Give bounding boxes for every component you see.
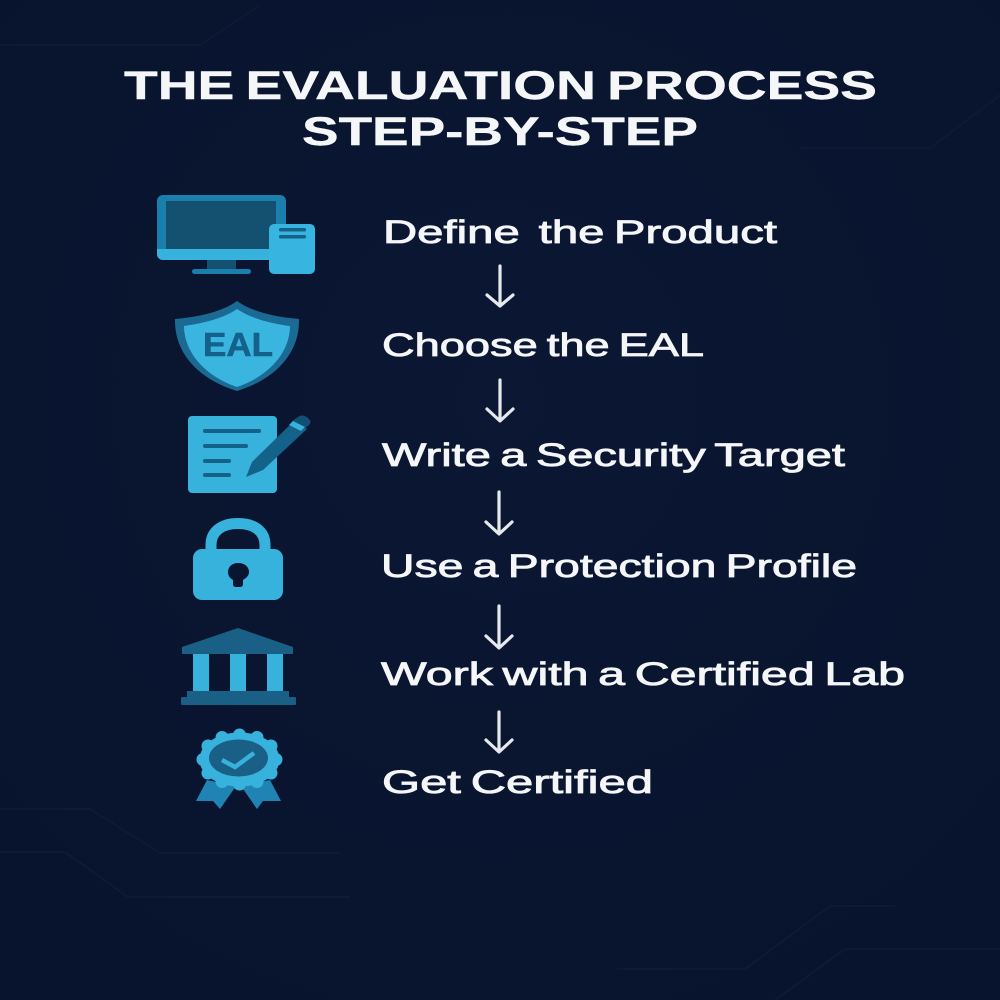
text: step 3: Write a Security Target bbox=[382, 437, 845, 473]
title bbox=[124, 64, 877, 154]
icon: EAL shield: EAL bbox=[203, 326, 273, 363]
arrow 3 bbox=[486, 492, 512, 534]
icon: computer monitor and device bbox=[157, 195, 315, 274]
arrow 1 bbox=[487, 266, 513, 306]
text: step 2: Choose the EAL bbox=[382, 327, 704, 363]
icon: document and pen bbox=[188, 416, 310, 493]
title: THE EVALUATION PROCESS bbox=[124, 64, 877, 108]
arrow 5 bbox=[486, 712, 512, 752]
text: step 4: Use a Protection Profile bbox=[381, 548, 857, 584]
text: step 5: Work with a Certified Lab bbox=[381, 656, 905, 692]
text: step 6: Get Certified bbox=[382, 764, 653, 800]
title: STEP-BY-STEP bbox=[302, 110, 698, 154]
arrow 2 bbox=[487, 380, 513, 421]
arrow 4 bbox=[486, 606, 512, 648]
icon: certified badge bbox=[196, 728, 282, 809]
icon: EAL shield bbox=[175, 301, 299, 391]
icon: padlock bbox=[193, 524, 283, 600]
icon: institution building bbox=[181, 628, 296, 705]
text: step 1: Define the Product bbox=[383, 214, 777, 250]
